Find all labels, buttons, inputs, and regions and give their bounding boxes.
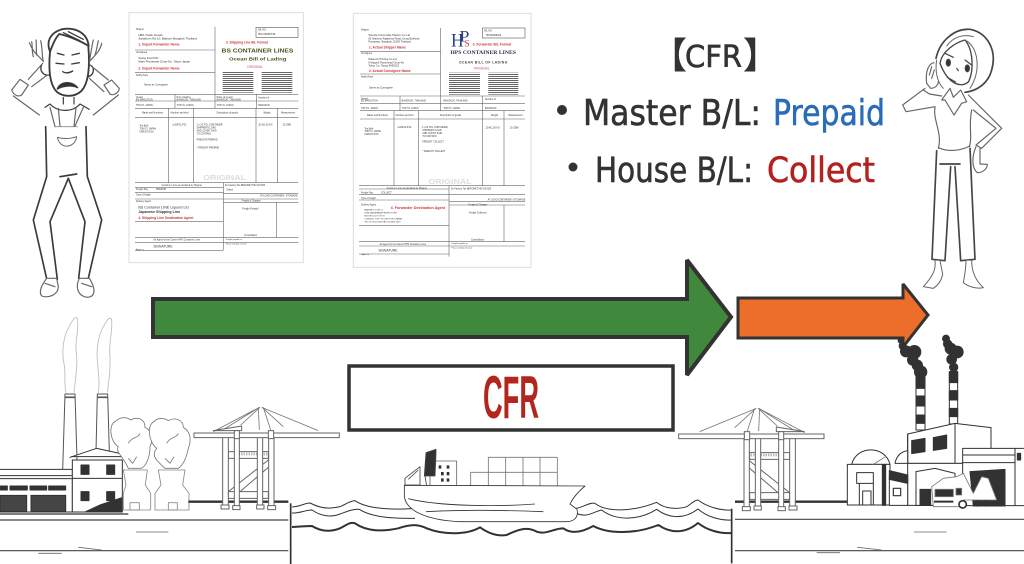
document: master bill of lading: BS MARLSTON bbox=[136, 98, 153, 101]
document: house bill of lading: TO CONTAIN bbox=[422, 135, 437, 138]
document: house bill of lading: Ex Factory Tax BEFORE THE GOODS bbox=[451, 188, 492, 191]
origin ground bbox=[0, 502, 291, 564]
document: house bill of lading: Freight Collected bbox=[469, 211, 487, 214]
factory chimneys bbox=[63, 394, 109, 470]
document: house bill of lading: HPS00608226 bbox=[486, 35, 502, 37]
factory office block bbox=[70, 448, 123, 512]
document: master bill of lading: ORIGINAL bbox=[203, 173, 247, 182]
document: house bill of lading: 20,411,00 KG bbox=[486, 128, 500, 130]
document: master bill of lading: BANGKOK, THAILAND bbox=[177, 98, 201, 101]
scene: container ship on waves bbox=[292, 449, 732, 535]
document: house bill of lading: Number and kind bbox=[396, 114, 414, 117]
document: house bill of lading: AND COUNT SAID bbox=[422, 132, 443, 135]
document: house bill of lading: CONTACT TWO FLOOR PORT JAPAN bbox=[364, 218, 403, 221]
document: house bill of lading: Same as Consignee bbox=[369, 85, 393, 89]
document: master bill of lading: * FREIGHT PREPAID bbox=[197, 146, 219, 149]
ship hull bbox=[404, 485, 585, 522]
document: master bill of lading: TOKYO, JAPAN bbox=[177, 104, 194, 107]
document: house bill of lading: SIGNATURE bbox=[378, 249, 398, 253]
document: house bill of lading: SHIPPER'S LOAD bbox=[422, 129, 442, 132]
man shoes bbox=[40, 278, 94, 297]
document: house bill of lading: OCEAN BILL OF LADING bbox=[459, 60, 508, 64]
document: master bill of lading: AT LOAD CONTAINER / STOWAGE bbox=[260, 194, 298, 197]
document: house bill of lading: BANGKOK bbox=[485, 107, 497, 110]
heading: CFR freight terms bbox=[651, 27, 779, 79]
document: master bill of lading: Freight payable at bbox=[226, 238, 242, 241]
document: master bill of lading: 20,411,00 KG bbox=[258, 125, 273, 127]
text: master B/L prepaid: Prepaid bbox=[773, 93, 885, 134]
document: house bill of lading: Consolidator bbox=[471, 239, 484, 242]
document: master bill of lading: SIGNATURE bbox=[153, 245, 173, 249]
dark smoke bbox=[898, 335, 964, 379]
document: master bill of lading: As Agent for the Carrier HPS Container Lines bbox=[153, 238, 201, 241]
document: house bill of lading: TOKYO, JAPAN bbox=[364, 130, 381, 133]
document: master bill of lading: BANGKOK bbox=[258, 104, 270, 107]
document: house bill of lading: Goods in Lump as declared by Shipper bbox=[387, 187, 427, 190]
document: master bill of lading: BS Container LINE Liquord Ltd bbox=[138, 205, 189, 209]
document: master bill of lading: Consignee bbox=[136, 52, 148, 54]
arrow: green main carriage bbox=[153, 260, 731, 375]
document: house bill of lading: S bbox=[464, 40, 470, 50]
document: master bill of lading: BS CONTAINER LINES bbox=[222, 49, 294, 55]
man torso and overalls bbox=[33, 97, 102, 282]
text: house B/L collect bbox=[568, 151, 875, 191]
document: house bill of lading: MARINE LOGIX Co bbox=[364, 209, 384, 212]
document: house bill of lading: Pomprarp, Bangkok 10100 Thailand bbox=[368, 40, 411, 44]
origin quay crane bbox=[194, 407, 339, 510]
document: house bill of lading: TOKYO, JAPAN bbox=[443, 107, 460, 110]
sea waves bbox=[292, 500, 732, 535]
document: master bill of lading: B/L NO. bbox=[258, 30, 267, 32]
document: house bill of lading: 25 CBM bbox=[510, 128, 518, 130]
document: house bill of lading: ORIGINAL bbox=[474, 66, 490, 70]
document: master bill of lading: Vessel bbox=[136, 97, 143, 99]
document: master bill of lading: 25 CBM bbox=[283, 125, 291, 127]
document: house bill of lading: Marks and Numbers bbox=[367, 114, 389, 117]
document: master bill of lading: Goods in Lump as declared by Shipper bbox=[162, 184, 202, 187]
document: master bill of lading: Shipper bbox=[136, 28, 144, 31]
document: master bill of lading: Delivery Agent bbox=[136, 200, 151, 203]
ship containers bbox=[471, 457, 557, 486]
document: house bill of lading: Freight & Charges bbox=[468, 203, 488, 206]
document: house bill of lading: 1. Actual Shipper Name bbox=[369, 46, 406, 50]
document: master bill of lading: BANGKOK, THAILAND bbox=[217, 98, 241, 101]
document: house bill of lading: BANGKOK, THAILAND bbox=[402, 100, 426, 103]
document: master bill of lading: SHIPPER'S LOAD bbox=[197, 127, 216, 130]
document: master bill of lading: Consolidator bbox=[244, 234, 257, 237]
document: house bill of lading: BANGKOK, THAILAND bbox=[443, 100, 468, 103]
scene: origin factory bbox=[0, 318, 339, 564]
document: house bill of lading: Shipper bbox=[361, 29, 369, 32]
document: house bill of lading: Weight bbox=[491, 114, 499, 117]
arrow: orange on-carriage bbox=[738, 284, 928, 347]
document: master bill of lading: Agent or bbox=[136, 248, 144, 251]
document: master bill of lading: Freight & Charges bbox=[242, 199, 261, 202]
destination hangar bbox=[963, 448, 1024, 506]
document: house bill of lading: Description of goods bbox=[440, 114, 462, 117]
document: house bill of lading: Measurement bbox=[508, 114, 523, 117]
document: house bill of lading: Place and date of issue bbox=[452, 247, 473, 250]
document: house bill of lading: Consignee bbox=[361, 53, 373, 55]
woman torso and collar bbox=[935, 88, 972, 150]
document: master bill of lading: Weight bbox=[263, 112, 271, 115]
document: house bill of lading: FREIGHT COLLECT bbox=[422, 142, 444, 144]
destination ground bbox=[732, 502, 1024, 563]
white smoke plumes bbox=[63, 318, 112, 393]
document: master bill of lading: Freight Pay bbox=[136, 188, 149, 191]
document: master bill of lading: Dated bbox=[227, 188, 234, 191]
document: house bill of lading: 1 x 20' FCL CONTAINER bbox=[422, 126, 448, 129]
factory left wing bbox=[0, 469, 72, 512]
document: master bill of lading: 1 x 20' FCL CONTAINER bbox=[197, 124, 223, 127]
document: master bill of lading: Ex Factory Tax BEFORE THE GOODS bbox=[225, 184, 266, 187]
document: house bill of lading: Tira Bulk bbox=[364, 127, 374, 130]
text: master B/L prepaid: Master B/L: bbox=[583, 93, 761, 134]
document: master bill of lading: 1. Import Forwarder Name bbox=[138, 42, 180, 46]
document: house bill of lading: Vessel bbox=[361, 98, 368, 100]
document: master bill of lading: Measurement bbox=[281, 112, 296, 115]
document: house bill of lading: TOKYO, JAPAN bbox=[361, 107, 378, 110]
character: puzzled woman bbox=[903, 29, 1002, 288]
document: house bill of lading: 1x20FCL/FCL bbox=[397, 127, 413, 129]
garbage truck bbox=[932, 473, 997, 508]
document: master bill of lading: Marks and Numbers bbox=[142, 112, 164, 115]
scene: destination factory bbox=[732, 335, 1024, 563]
text: house B/L collect: Collect bbox=[767, 151, 875, 191]
document: house bill of lading: BS MARLSTON bbox=[361, 100, 378, 103]
man head and hair bbox=[41, 29, 93, 96]
heading: CFR freight terms: CFR bbox=[685, 40, 742, 75]
document: master bill of lading: PREPAID bbox=[156, 188, 166, 191]
destination domed annex bbox=[847, 450, 908, 505]
document: house bill of lading: Number of bbox=[485, 98, 496, 101]
document: master bill of lading: Freight Prepaid bbox=[242, 207, 259, 210]
document: master bill of lading bbox=[129, 13, 303, 263]
heading: CFR freight terms: 【 bbox=[651, 27, 687, 79]
document: master bill of lading: Sarathorn Rd 10, Bathorn Bangkok Thailand bbox=[138, 37, 197, 41]
document: master bill of lading: Place and date of issue bbox=[226, 242, 248, 245]
document: house bill of lading: TOKYO, JAPAN bbox=[402, 107, 419, 110]
document: master bill of lading: CARGO NOS bbox=[139, 130, 154, 133]
document: master bill of lading: 2. Import Forwarder Name bbox=[138, 66, 180, 70]
document: master bill of lading: 1x20FCL/FCL bbox=[172, 125, 188, 127]
document: house bill of lading: 4. Forwarder Destination Agent bbox=[391, 206, 446, 210]
document: master bill of lading: Number of bbox=[258, 97, 270, 100]
document: house bill of lading: 3. Forwarder B/L Format bbox=[473, 42, 512, 46]
cooling towers bbox=[123, 470, 189, 510]
document: master bill of lading: TOKYO, JAPAN bbox=[217, 104, 234, 107]
ship superstructure bbox=[405, 449, 457, 486]
label box: CFR: CFR bbox=[483, 364, 539, 431]
document: house bill of lading: H bbox=[451, 30, 464, 51]
destination main building bbox=[908, 423, 991, 505]
destination quay crane bbox=[679, 408, 824, 511]
document: master bill of lading: HBS Trade Goods bbox=[138, 33, 163, 37]
document: house bill of lading: Tokyo Co, Tango 9692021 bbox=[368, 64, 400, 68]
document: master bill of lading: Notify Party bbox=[136, 74, 149, 77]
document: master bill of lading: Ocean Bill of Lading bbox=[229, 57, 286, 63]
woman arms and hands bbox=[903, 63, 1002, 173]
woman trousers bbox=[932, 148, 975, 261]
label box: CFR bbox=[349, 364, 673, 431]
document: master bill of lading: Place of receipt bbox=[217, 96, 233, 99]
document: master bill of lading: Japanese Shipping Line bbox=[138, 210, 180, 214]
document: house bill of lading: Delivery Agent bbox=[361, 204, 376, 207]
document: house bill of lading: 8786 WAKAYAMA PREFECTURE bbox=[364, 212, 397, 215]
document: house bill of lading: Agent or bbox=[362, 253, 370, 256]
document: house bill of lading: MIZORO-KU TOKYO bbox=[364, 216, 385, 218]
document: house bill of lading: COLLECT bbox=[381, 192, 392, 194]
document: master bill of lading: TOKYO, JAPAN bbox=[139, 127, 156, 130]
document: master bill of lading: Suing Fuel INC bbox=[138, 56, 159, 60]
document: house bill of lading: P bbox=[459, 28, 469, 45]
document: house bill of lading: B/L NO. bbox=[484, 30, 493, 32]
document: house bill of lading: CARGO NOS bbox=[364, 133, 379, 136]
document: master bill of lading: FREIGHT PREPAID bbox=[197, 138, 218, 141]
document: house bill of lading: Sample Commodity Plastics Co Ltd bbox=[368, 33, 410, 37]
document: house bill of lading: Freight payable at bbox=[452, 242, 468, 245]
document: house bill of lading: * FREIGHT COLLECT bbox=[422, 151, 446, 153]
man hands and arms bbox=[12, 40, 119, 115]
text: master B/L prepaid bbox=[557, 93, 885, 134]
woman shoes bbox=[923, 261, 983, 288]
document: house bill of lading: TEL 03 1234 5563 FAX 03 4456 5563 bbox=[364, 221, 401, 224]
document: master bill of lading: Type of freight bbox=[136, 193, 151, 196]
document: house bill of lading: 2. Actual Consignee Name bbox=[369, 69, 411, 73]
document: master bill of lading: ORIGINAL bbox=[247, 65, 263, 69]
document: house bill of lading: 6 Magnol Rosemead Chuo-Ku bbox=[368, 60, 405, 64]
document: house bill of lading: Plastech Printing Co Ltd bbox=[368, 57, 397, 61]
document: house bill of lading bbox=[353, 13, 531, 267]
document: house bill of lading: 60 Nakhorn Rajasima Road, Dong Bohsrak bbox=[368, 36, 420, 40]
document: master bill of lading: BSI 60180738 bbox=[258, 32, 276, 36]
document: master bill of lading: Tira Bulk bbox=[139, 125, 149, 128]
document: house bill of lading: ORIGINAL bbox=[428, 177, 472, 186]
destination chimneys bbox=[916, 372, 958, 430]
document: master bill of lading: Same as Consignee bbox=[144, 83, 168, 87]
document: master bill of lading: Port of lading bbox=[177, 96, 191, 99]
steam clouds bbox=[111, 418, 190, 468]
document: master bill of lading: TO CONTAIN bbox=[197, 133, 211, 136]
text: house B/L collect: House B/L: bbox=[595, 151, 753, 191]
document: master bill of lading: 3. Shipping Line B/L Format bbox=[226, 41, 269, 45]
document: master bill of lading: 4. Shipping Line Destination Agent bbox=[138, 216, 194, 220]
document: house bill of lading: HPS CONTAINER LINES bbox=[450, 50, 516, 56]
woman head and hair bbox=[936, 29, 993, 92]
document: house bill of lading: As Agent for the Carrier HPS Container Lines bbox=[379, 243, 427, 246]
document: master bill of lading: AND COUNT SAID bbox=[197, 130, 217, 133]
document: master bill of lading: Main Printstreet Chuo-Ku, Tokyo Japan bbox=[138, 60, 191, 64]
document: house bill of lading: Freight Pay bbox=[361, 191, 374, 194]
document: house bill of lading: Type of freight bbox=[361, 197, 376, 200]
heading: CFR freight terms: 】 bbox=[743, 27, 779, 79]
character: stressed man in overalls bbox=[12, 29, 119, 297]
document: master bill of lading: Number and kind bbox=[171, 112, 189, 115]
document: house bill of lading: AT LOAD CONTAINER / STOWAGE bbox=[488, 199, 526, 202]
document: house bill of lading: Notify Party bbox=[361, 76, 374, 79]
document: master bill of lading: Description of goods bbox=[217, 112, 239, 115]
document: master bill of lading: TOKYO, JAPAN bbox=[136, 104, 153, 107]
